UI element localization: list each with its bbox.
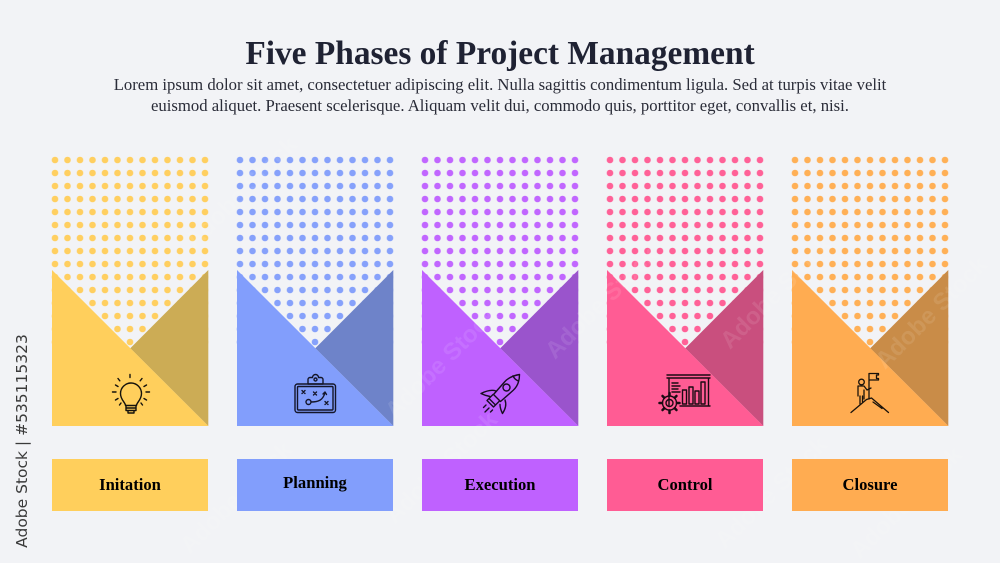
panel: closure graphic — [789, 154, 951, 426]
stock credit: Adobe Stock | #535115323 — [13, 334, 31, 548]
icon: light bulb — [112, 374, 150, 413]
right fold: control — [685, 270, 763, 426]
watermark: Adobe Stock — [540, 241, 663, 364]
dot pattern: planning — [234, 154, 396, 348]
right fold: planning — [315, 270, 393, 426]
panel: execution graphic — [419, 154, 581, 426]
right fold: execution — [500, 270, 578, 426]
intro text: Lorem ipsum dolor sit amet, consectetuer adipiscing elit. Nulla sagittis condimentum ligula. Sed at turpis vitae velit — [114, 75, 886, 94]
label: Closure — [792, 459, 948, 511]
watermark: Adobe Stock — [380, 406, 503, 529]
dot pattern: closure — [789, 154, 951, 348]
dot pattern: control — [604, 154, 766, 348]
watermark: Adobe Stock — [175, 436, 298, 559]
label: Planning — [237, 459, 393, 511]
watermark: Adobe Stock — [380, 301, 503, 424]
panel: planning graphic — [234, 154, 396, 426]
intro text: euismod aliquet. Praesent scelerisque. Aliquam velit dui, commodo quis, porttitor eget, convallis et, nisi. — [151, 96, 849, 115]
right fold: closure — [870, 270, 948, 426]
panel: control graphic — [604, 154, 766, 426]
label: Closure: Closure — [842, 475, 898, 494]
label: Control: Control — [657, 475, 712, 494]
right fold: initiation — [130, 270, 208, 426]
label: Execution: Execution — [464, 475, 536, 494]
watermark: Adobe Stock — [870, 251, 993, 374]
left fold: initiation — [52, 270, 208, 426]
left fold: execution — [422, 270, 578, 426]
label: Initation: Initation — [99, 475, 161, 494]
dot pattern: execution — [419, 154, 581, 348]
left fold: closure — [792, 270, 948, 426]
intro text — [114, 75, 886, 115]
label: Control — [607, 459, 763, 511]
panel: initiation graphic — [49, 154, 211, 426]
left fold: planning — [237, 270, 393, 426]
left fold: control — [607, 270, 763, 426]
dot pattern: initiation — [49, 154, 211, 348]
icon: strategy board — [295, 374, 336, 412]
icon: person with flag on summit — [851, 374, 888, 412]
watermark: Adobe Stock — [845, 441, 968, 563]
label: Initation — [52, 459, 208, 511]
label: Execution — [422, 459, 578, 511]
watermark: Adobe Stock — [180, 131, 303, 254]
icon: presentation chart with gear — [660, 375, 710, 413]
watermark — [175, 131, 993, 563]
watermark: Adobe Stock — [710, 431, 833, 554]
label: Planning: Planning — [283, 473, 347, 492]
title: Five Phases of Project Management — [245, 35, 755, 72]
icon: rocket — [481, 374, 520, 414]
watermark: Adobe Stock — [715, 231, 838, 354]
